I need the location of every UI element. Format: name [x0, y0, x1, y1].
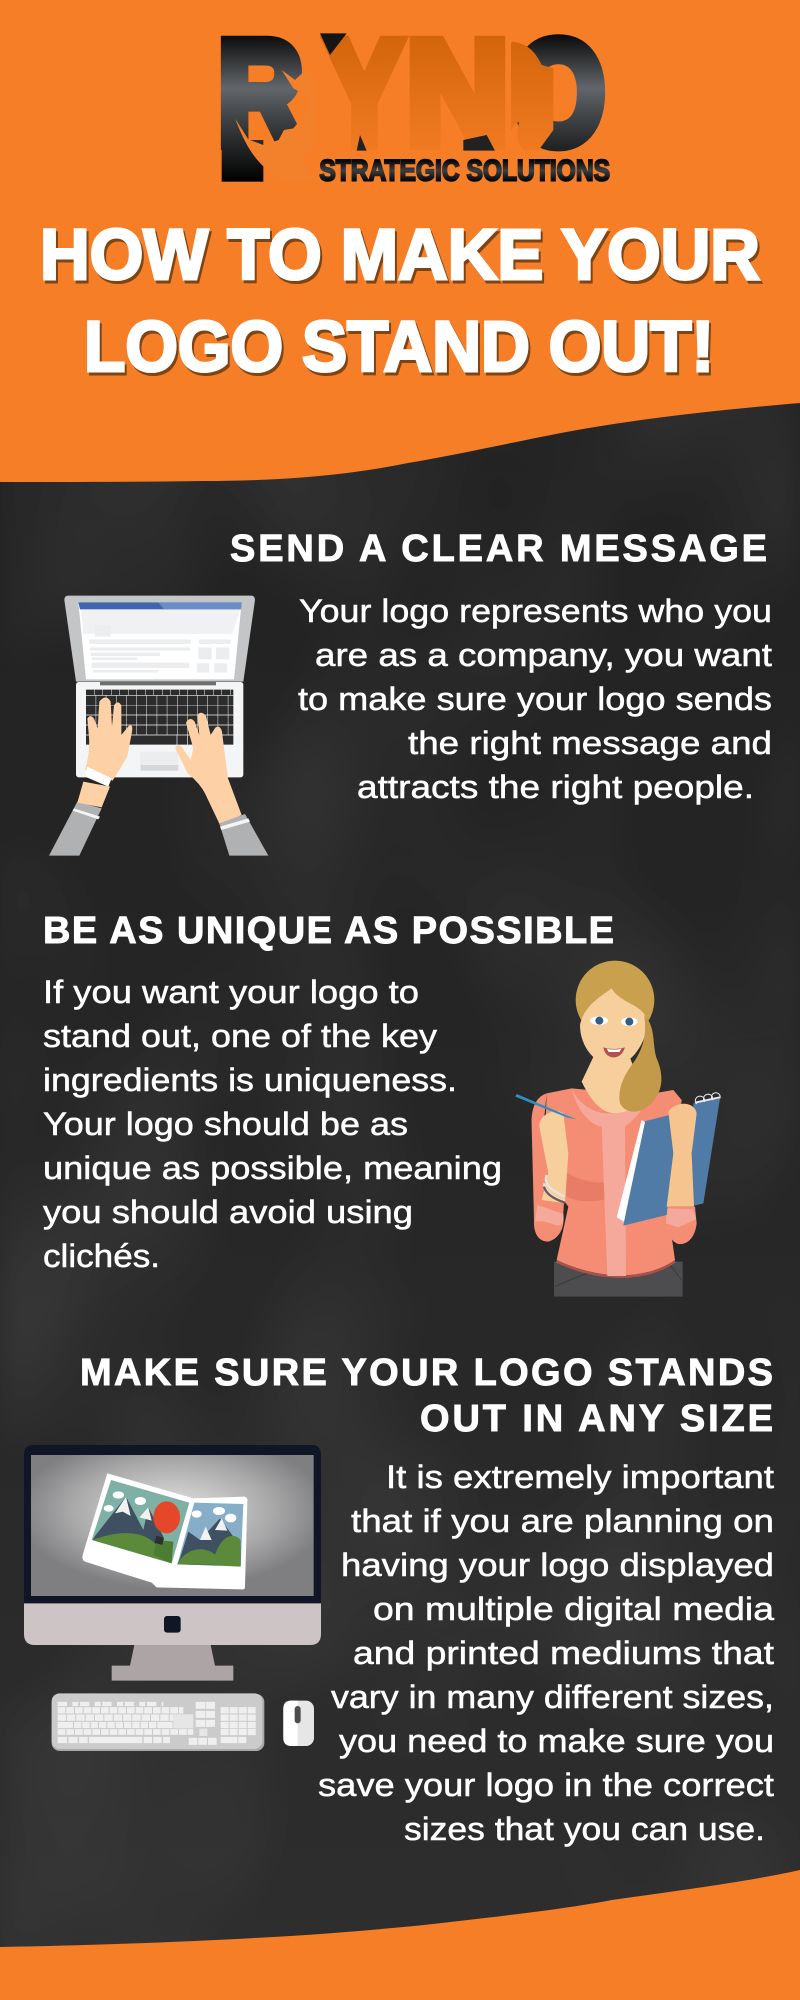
text block: be as unique as possible: If you want your logo to [43, 974, 419, 1010]
mouse [283, 1701, 314, 1746]
text block: send a clear message: attracts the right people. [357, 769, 754, 805]
panel: make sure your logo stands out in any size [24, 1352, 774, 1847]
text block: send a clear message: Your logo represents who you [299, 593, 772, 629]
logo wordmark [218, 11, 605, 175]
title: HOW TO MAKE YOUR [40, 216, 760, 295]
text block: be as unique as possible: Your logo should be as [43, 1106, 408, 1142]
text block: logo sizes [318, 1459, 774, 1847]
title: LOGO STAND OUT! [84, 308, 714, 387]
text block: be as unique as possible: you should avoid using [43, 1194, 413, 1230]
text block: logo sizes: you need to make sure you [339, 1723, 774, 1759]
orange header wave [0, 0, 800, 482]
text block: logo sizes: on multiple digital media [373, 1591, 774, 1627]
text block: be as unique as possible: stand out, one of the key [43, 1018, 437, 1054]
keyboard [52, 1693, 264, 1751]
text block: logo sizes: save your logo in the correct [318, 1767, 774, 1803]
logo wordmark: N [407, 12, 508, 175]
heading: make sure your logo stands out in any size: MAKE SURE YOUR LOGO STANDS [80, 1352, 773, 1394]
text block: logo sizes: It is extremely important [386, 1459, 774, 1495]
text block: logo sizes: that if you are planning on [351, 1503, 774, 1539]
panel: send a clear message [49, 528, 772, 856]
panel: be as unique as possible [43, 910, 720, 1297]
monitor [24, 1445, 321, 1681]
heading: be as unique as possible: BE AS UNIQUE AS POSSIBLE [43, 910, 614, 952]
orange footer wave [0, 1870, 800, 2000]
icon: woman with notebook [515, 961, 720, 1297]
text block: logo sizes: vary in many different sizes, [331, 1679, 774, 1715]
text block: be as unique as possible: ingredients is uniqueness. [43, 1062, 457, 1098]
text block: be as unique as possible: clichés. [43, 1238, 160, 1274]
text block: send a clear message: are as a company, you want [315, 637, 772, 673]
logo wordmark: O [512, 11, 605, 175]
text block: send a clear message: the right message and [408, 725, 772, 761]
heading: make sure your logo stands out in any size: OUT IN ANY SIZE [420, 1398, 773, 1440]
text block: send a clear message [298, 593, 772, 805]
logo: Ryno Strategic Solutions [218, 11, 610, 188]
icon: desktop computer with keyboard and mouse [24, 1445, 321, 1751]
logo tagline: STRATEGIC SOLUTIONS [319, 155, 610, 188]
text block: logo sizes: and printed mediums that [353, 1635, 774, 1671]
text block: be as unique as possible [43, 974, 502, 1274]
heading: make sure your logo stands out in any size [80, 1352, 773, 1440]
logo wordmark: R [218, 12, 303, 175]
text block: be as unique as possible: unique as possible, meaning [43, 1150, 502, 1186]
rhino silhouette [235, 33, 553, 182]
icon: laptop with typing hands [49, 596, 268, 856]
text block: logo sizes: sizes that you can use. [404, 1811, 765, 1847]
text block: send a clear message: to make sure your logo sends [298, 681, 772, 717]
heading: send a clear message: SEND A CLEAR MESSAGE [230, 528, 767, 570]
text block: logo sizes: having your logo displayed [341, 1547, 774, 1583]
title [40, 216, 760, 387]
logo wordmark: Y [327, 11, 402, 175]
